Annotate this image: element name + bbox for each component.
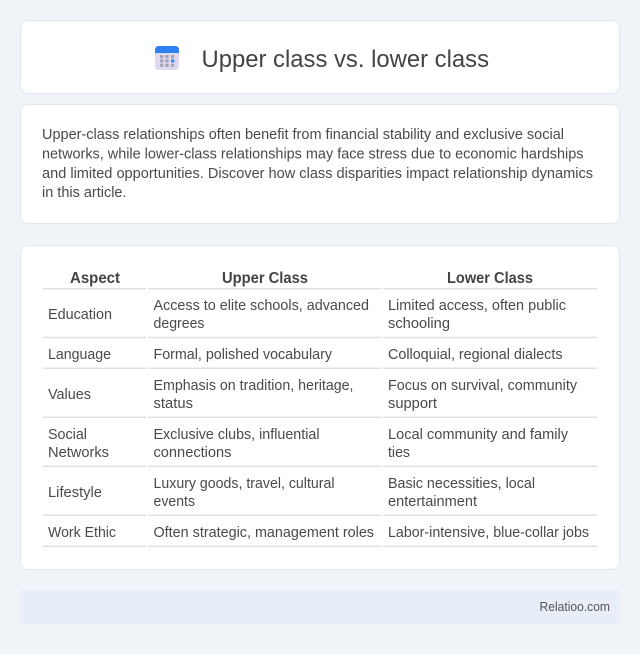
row: language bbox=[48, 347, 562, 363]
row: work ethic: Work Ethic bbox=[48, 525, 116, 541]
row: education: Access to elite schools, advanced bbox=[154, 298, 369, 314]
row: lifestyle: entertainment bbox=[388, 494, 477, 510]
footer credit: Relatioo.com bbox=[540, 600, 610, 614]
row: education: Education bbox=[48, 307, 112, 323]
row: language: Colloquial, regional dialects bbox=[388, 347, 562, 363]
row: language: Formal, polished vocabulary bbox=[154, 347, 333, 363]
table header: Aspect bbox=[70, 270, 121, 287]
row: education bbox=[48, 298, 566, 332]
panel: comparison table bbox=[20, 246, 620, 570]
row: social networks: Local community and family bbox=[388, 427, 569, 443]
footer bbox=[20, 590, 620, 624]
row: lifestyle: Basic necessities, local bbox=[388, 476, 535, 492]
row: values: Values bbox=[48, 387, 91, 403]
row: values bbox=[48, 378, 578, 412]
table header: Upper Class bbox=[222, 270, 308, 287]
row: lifestyle: Lifestyle bbox=[48, 485, 102, 501]
row: values: status bbox=[154, 396, 193, 412]
row: work ethic bbox=[48, 525, 589, 541]
panel: title bbox=[20, 20, 620, 94]
icon: calendar bbox=[155, 46, 179, 70]
row: lifestyle bbox=[48, 476, 535, 510]
row: language: Language bbox=[48, 347, 111, 363]
row: social networks: Social bbox=[48, 427, 87, 443]
row: education: Limited access, often public bbox=[388, 298, 566, 314]
row: social networks: ties bbox=[388, 445, 410, 461]
row: education: degrees bbox=[154, 316, 204, 332]
table header: Lower Class bbox=[447, 270, 533, 287]
row: work ethic: Labor-intensive, blue-collar jobs bbox=[388, 525, 589, 541]
row: social networks: Exclusive clubs, influential bbox=[154, 427, 320, 443]
intro paragraph bbox=[42, 127, 593, 201]
row: work ethic: Often strategic, management roles bbox=[154, 525, 374, 541]
intro paragraph: and limited opportunities. Discover how class disparities impact relationship dynamics bbox=[42, 166, 593, 182]
intro paragraph: in this article. bbox=[42, 185, 126, 201]
row: social networks: Networks bbox=[48, 445, 109, 461]
row: social networks bbox=[48, 427, 569, 461]
row: values: Emphasis on tradition, heritage, bbox=[154, 378, 354, 394]
intro paragraph: networks, while lower-class relationships may face stress due to economic hardships bbox=[42, 146, 584, 162]
table header bbox=[70, 270, 533, 287]
row: values: support bbox=[388, 396, 437, 412]
row: lifestyle: events bbox=[154, 494, 195, 510]
row: values: Focus on survival, community bbox=[388, 378, 578, 394]
title text: Upper class vs. lower class bbox=[202, 46, 489, 73]
panel: introduction bbox=[20, 104, 620, 224]
row: education: schooling bbox=[388, 316, 450, 332]
intro paragraph: Upper-class relationships often benefit from financial stability and exclusive social bbox=[42, 127, 564, 143]
row: social networks: connections bbox=[154, 445, 232, 461]
row: lifestyle: Luxury goods, travel, cultural bbox=[154, 476, 334, 492]
